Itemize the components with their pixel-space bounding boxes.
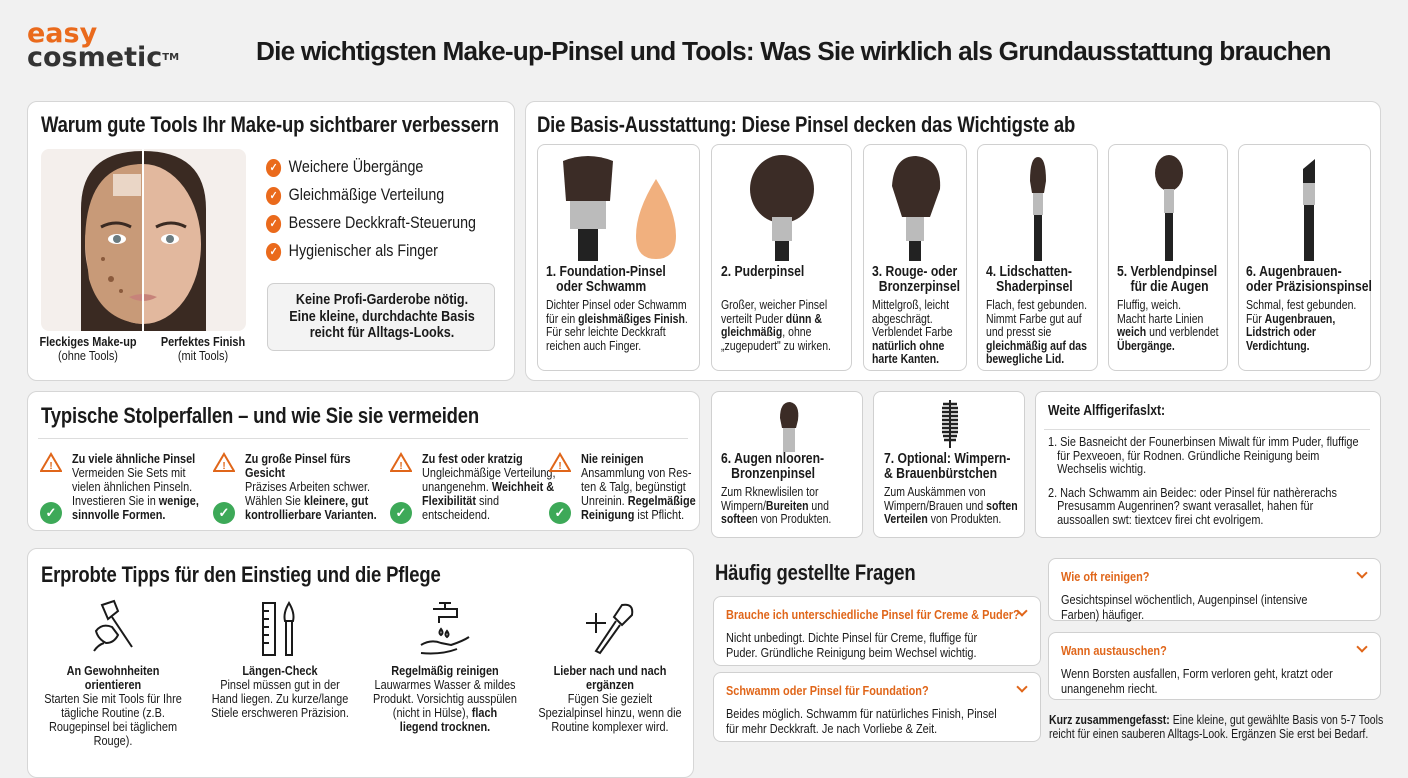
text: further tips: 1. Sie Basneicht der Founerbinsen Miwalt für imm Puder, fluffige [1048, 434, 1359, 449]
text: powder: 2. Puderpinsel [721, 264, 804, 280]
heading: Erprobte Tipps für den Einstieg und die Pflege [41, 562, 441, 587]
faq 3: Wie oft reinigen? [1061, 569, 1149, 584]
text: powder [721, 264, 831, 352]
logo: cosmeticTM [27, 42, 179, 73]
pitfall 3 [390, 451, 556, 524]
text: rouge: Bronzerpinsel [879, 279, 960, 295]
icon: warning [40, 452, 62, 472]
tip 1 [44, 600, 182, 748]
card: brow [1238, 144, 1371, 371]
faq 3: Gesichtspinsel wöchentlich, Augenpinsel (intensive [1061, 592, 1307, 606]
tip 2: Längen-Check [242, 663, 318, 678]
text: further tips: Presusamm Augenrinen? swant verasallet, hahen für [1057, 498, 1313, 513]
text: shader: Shaderpinsel [996, 279, 1073, 295]
icon: shader brush [1030, 157, 1046, 261]
faq 4 [1048, 632, 1381, 700]
text: shader: Flach, fest gebunden. Nimmt Farbe gut auf und presst sie gleichmäßig auf das bewegliche Lid. [986, 298, 1087, 366]
tip 1: An Gewohnheiten [67, 663, 159, 678]
faq 4: Wann austauschen? [1061, 643, 1167, 658]
card: shader [977, 144, 1098, 371]
pitfall 4: ✓ [555, 505, 565, 520]
pitfall 4 [549, 451, 696, 524]
tip 4: Fügen Sie gezielt Spezialpinsel hinzu, wenn die Routine komplexer wird. [538, 691, 682, 734]
text: foundation: oder Schwamm [556, 279, 646, 295]
pitfall 1: Vermeiden Sie Sets mit vielen ähnlichen Pinseln. Investieren Sie in wenige, sinnvolle Formen. [72, 465, 199, 522]
panel: pitfalls [27, 391, 700, 531]
panel: why tools [27, 101, 515, 381]
tip 2 [211, 601, 349, 720]
faq 2: Schwamm oder Pinsel für Foundation? [726, 683, 929, 698]
summary text: Kurz zusammengefasst: Eine kleine, gut gewählte Basis von 5-7 Tools [1049, 713, 1383, 727]
text: eye bronzer: Bronzenpinsel [731, 466, 815, 482]
tip 4 [538, 604, 682, 734]
pitfall 3: Ungleichmäßige Verteilung, unangenehm. Weichheit & Flexibilität sind entscheidend. [422, 465, 556, 522]
icon: warning: ! [49, 461, 53, 472]
heading: Die Basis-Ausstattung: Diese Pinsel decken das Wichtigste ab [537, 112, 1075, 137]
benefits list: ✓ [270, 190, 277, 202]
summary text: reicht für einen sauberen Alltags-Look. Ergänzen Sie erst bei Bedarf. [1049, 727, 1368, 741]
text: spoolie: 7. Optional: Wimpern- [884, 451, 1010, 467]
icon: angled brush [1303, 159, 1315, 261]
panel: basics [525, 101, 1381, 381]
benefits list: Gleichmäßige Verteilung [289, 185, 444, 204]
logo [27, 18, 179, 73]
pitfall 1: ✓ [46, 505, 56, 520]
text: further tips: für Pexveoen, für Rodnen. Gründliche Reinigung beim [1057, 448, 1319, 462]
icon: powder brush [750, 155, 814, 261]
summary text [1049, 713, 1383, 741]
pitfall 2 [213, 451, 377, 524]
text: brow: oder Präzisionspinsel [1246, 279, 1372, 295]
heading: FAQ: Häufig gestellte Fragen [715, 560, 915, 585]
pitfall 2: ! [222, 461, 226, 472]
benefits list: Bessere Deckkraft-Steuerung [289, 213, 476, 232]
benefits list [266, 157, 476, 261]
image captions: (ohne Tools) [58, 348, 118, 363]
text: blending [1117, 264, 1219, 352]
panel: tips [27, 548, 694, 778]
text: blending: für die Augen [1131, 279, 1209, 295]
text: rouge: Mittelgroß, leicht abgeschrägt. Verblendet Farbe natürlich ohne harte Kanten. [872, 298, 953, 366]
text: further tips: aussoallen swt: tiextcev firei cht evolrigem. [1057, 512, 1263, 526]
text: foundation: 1. Foundation-Pinsel [546, 264, 666, 280]
pitfall 2: Gesicht [245, 465, 285, 480]
text: foundation [546, 264, 688, 352]
icon: blending brush [1155, 155, 1183, 261]
faq 4: unangenehm riecht. [1061, 681, 1158, 696]
card: rouge [863, 144, 967, 371]
faq 1: Nicht unbedingt. Dichte Pinsel für Creme, fluffige für [726, 630, 977, 644]
text: blending: 5. Verblendpinsel [1117, 264, 1217, 280]
faq 3 [1048, 558, 1381, 621]
text: eye bronzer [721, 451, 831, 526]
callout: Eine kleine, durchdachte Basis [289, 308, 475, 324]
tip 1: orientieren [85, 677, 141, 692]
pitfall 3: ! [399, 461, 403, 472]
text: brow: Schmal, fest gebunden. Für Augenbrauen, [1246, 298, 1356, 326]
card: powder [711, 144, 852, 371]
pitfall 2: ✓ [219, 505, 229, 520]
benefits list: ✓ [270, 218, 277, 230]
pitfall 4: Nie reinigen [581, 451, 644, 466]
callout: Keine Profi-Garderobe nötig. [296, 291, 468, 308]
text: spoolie [884, 451, 1018, 526]
callout [267, 283, 495, 351]
panel: why tools: Perfektes Finish [161, 334, 245, 349]
pitfall 4: Ansammlung von Res-ten & Talg, begünstigt Unreinin. Regelmäßige Reinigung ist Pflicht. [581, 465, 696, 522]
icon: rouge brush [892, 156, 940, 261]
tip 3: Regelmäßig reinigen [391, 663, 499, 678]
card: eye bronzer [711, 391, 863, 538]
tip 1: Starten Sie mit Tools für Ihre tägliche Routine (z.B. Rougepinsel bei täglichem Rouge). [44, 691, 182, 748]
text: blending: Fluffig, weich. [1117, 298, 1181, 312]
pitfall 1 [40, 451, 199, 524]
title: Die wichtigsten Make-up-Pinsel und Tools: Was Sie wirklich als Grundausstattung brauchen [256, 36, 1331, 66]
faq 4: Wenn Borsten ausfallen, Form verloren geht, kratzt oder [1061, 666, 1333, 680]
text: rouge [872, 264, 960, 366]
text: brow [1246, 264, 1372, 352]
text: eye bronzer: Zum Rknewlisilen tor Wimpern/Bureiten und softeen von Produkten. [721, 485, 831, 526]
panel: why tools: (mit Tools) [178, 348, 228, 363]
pitfall 3: Zu fest oder kratzig [422, 451, 523, 466]
faq 1 [713, 596, 1041, 666]
card: spoolie [873, 391, 1025, 538]
heading: Typische Stolperfallen – und wie Sie sie vermeiden [41, 403, 479, 428]
faq 2: für mehr Deckkraft. Je nach Vorliebe & Zeit. [726, 721, 937, 736]
card: blending [1108, 144, 1228, 371]
callout: reicht für Alltags-Looks. [310, 324, 454, 341]
heading: Warum gute Tools Ihr Make-up sichtbarer verbessern [41, 112, 499, 137]
tip 4: Lieber nach und nach [554, 663, 666, 678]
icon: small brush [780, 402, 798, 452]
benefits list: Hygienischer als Finger [289, 241, 438, 260]
card: foundation [537, 144, 700, 371]
text: spoolie: & Brauenbürstchen [884, 466, 997, 482]
benefits list: ✓ [270, 246, 277, 258]
text: blending: Macht harte Linien weich und verblendet Übergänge. [1117, 312, 1219, 352]
text: further tips: 2. Nach Schwamm ain Beidec: oder Pinsel für nathèrerachs [1048, 484, 1337, 500]
text: foundation: Dichter Pinsel oder Schwamm für ein gleishmäßiges Finish. Für sehr leichte Deckkraft reichen auch Finger. [546, 298, 688, 352]
pitfall 3: ✓ [396, 505, 406, 520]
image captions: Fleckiges Make-up [39, 334, 137, 349]
text: further tips [1048, 434, 1359, 526]
text: powder: Großer, weicher Pinsel verteilt Puder dünn & gleichmäßig, ohne „zugepudert" zu wirken. [721, 298, 831, 352]
icon: foundation brush and sponge [563, 156, 676, 261]
pitfall 2: Präzises Arbeiten schwer. Wählen Sie kleinere, gut kontrollierbare Varianten. [245, 479, 377, 522]
text: shader [986, 264, 1087, 366]
text: further tips: Wechselis wichtig. [1057, 461, 1146, 476]
tip 3: Lauwarmes Wasser & mildes Produkt. Vorsichtig ausspülen (nicht in Hülse), flach liegend trocknen. [373, 677, 517, 734]
text: shader: 4. Lidschatten- [986, 264, 1072, 280]
tip 2: Pinsel müssen gut in der Hand liegen. Zu kurze/lange Stiele erschweren Präzision. [211, 677, 349, 720]
text: rouge: 3. Rouge- oder [872, 264, 957, 280]
faq 1: Brauche ich unterschiedliche Pinsel für Creme & Puder? [726, 607, 1020, 622]
pitfall 4: ! [558, 461, 562, 472]
tip 4: ergänzen [586, 677, 634, 692]
text: spoolie: Zum Auskämmen von Wimpern/Brauen und soften Verteilen von Produkten. [884, 485, 1018, 526]
pitfall 1: Zu viele ähnliche Pinsel [72, 451, 195, 466]
image captions [39, 334, 137, 363]
text: brow: Lidstrich oder Verdichtung. [1246, 325, 1316, 352]
faq 3: Farben) häufiger. [1061, 607, 1144, 622]
tip 3 [373, 602, 517, 734]
panel: further tips [1035, 391, 1381, 538]
panel: further tips: Weite Alffigerifaslxt: [1048, 403, 1165, 419]
benefits list: ✓ [270, 162, 277, 174]
faq 1: Puder. Gründliche Reinigung beim Wechsel wichtig. [726, 645, 976, 660]
benefits list: Weichere Übergänge [289, 157, 423, 176]
logo: easy [27, 18, 97, 49]
faq 2 [713, 672, 1041, 742]
pitfall 2: Zu große Pinsel fürs [245, 451, 351, 466]
icon: spoolie [942, 400, 958, 448]
text: brow: 6. Augenbrauen- [1246, 264, 1342, 280]
face comparison image [41, 149, 246, 331]
text: eye bronzer: 6. Augen nlooren- [721, 451, 824, 467]
faq 2: Beides möglich. Schwamm für natürliches Finish, Pinsel [726, 706, 997, 720]
